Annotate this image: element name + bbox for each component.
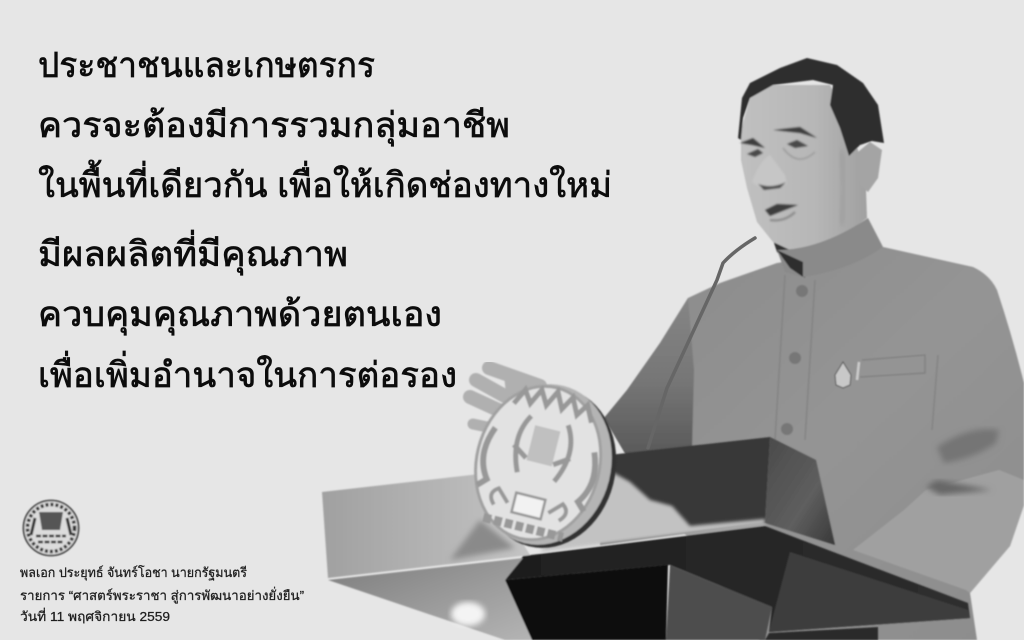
podium left band bbox=[322, 474, 530, 578]
elbow fold bbox=[926, 480, 992, 495]
podium highlight bbox=[540, 472, 765, 552]
grey panel bbox=[666, 565, 772, 640]
podium emblem bbox=[457, 369, 633, 562]
ear bbox=[858, 142, 882, 192]
podium bbox=[322, 437, 970, 640]
sleeve fold bbox=[937, 429, 999, 463]
pocket bbox=[860, 355, 925, 377]
headline quote: ควบคุมคุณภาพด้วยตนเอง bbox=[38, 295, 442, 335]
hair bbox=[738, 58, 884, 156]
headline quote: มีผลผลิตที่มีคุณภาพ bbox=[38, 230, 348, 275]
pen bbox=[857, 362, 859, 380]
source credit bbox=[20, 565, 304, 624]
collar bbox=[777, 218, 883, 277]
black panel bbox=[505, 565, 668, 640]
podium side facet bbox=[765, 437, 835, 545]
source credit: รายการ “ศาสตร์พระราชา สู่การพัฒนาอย่างยั่งยืน” bbox=[20, 587, 304, 604]
left sleeve bbox=[604, 298, 694, 462]
face bbox=[741, 85, 867, 250]
facial features bbox=[740, 127, 845, 225]
placket bbox=[775, 275, 938, 440]
podium front band dark bbox=[600, 437, 770, 545]
podium smudge bbox=[450, 520, 515, 560]
right lower face bbox=[769, 552, 970, 632]
podium underside bbox=[505, 526, 970, 632]
hand bbox=[470, 368, 550, 428]
buttons bbox=[781, 285, 808, 435]
headline quote bbox=[38, 46, 612, 395]
headline quote: ในพื้นที่เดียวกัน เพื่อให้เกิดช่องทางใหม่ bbox=[38, 159, 612, 205]
source credit: พลเอก ประยุทธ์ จันทร์โอชา นายกรัฐมนตรี bbox=[20, 565, 247, 581]
base strip bbox=[765, 627, 878, 640]
source credit: วันที่ 11 พฤศจิกายน 2559 bbox=[20, 608, 170, 624]
jacket body bbox=[604, 247, 1024, 640]
neck shadow bbox=[773, 240, 805, 278]
emblem crest bbox=[469, 378, 611, 541]
badge bbox=[835, 362, 851, 388]
headline quote: เพื่อเพิ่มอำนาจในการต่อรอง bbox=[38, 351, 457, 395]
logo: small government seal bbox=[24, 500, 78, 556]
collar opening bbox=[777, 250, 803, 277]
glare bbox=[451, 602, 485, 626]
right arm bbox=[853, 470, 1024, 593]
headline quote: ประชาชนและเกษตรกร bbox=[38, 46, 375, 85]
microphone bbox=[648, 238, 755, 448]
lower-left panel bbox=[328, 558, 532, 640]
headline quote: ควรจะต้องมีการรวมกลุ่มอาชีพ bbox=[38, 106, 510, 146]
photo: speaker bbox=[604, 58, 1024, 640]
